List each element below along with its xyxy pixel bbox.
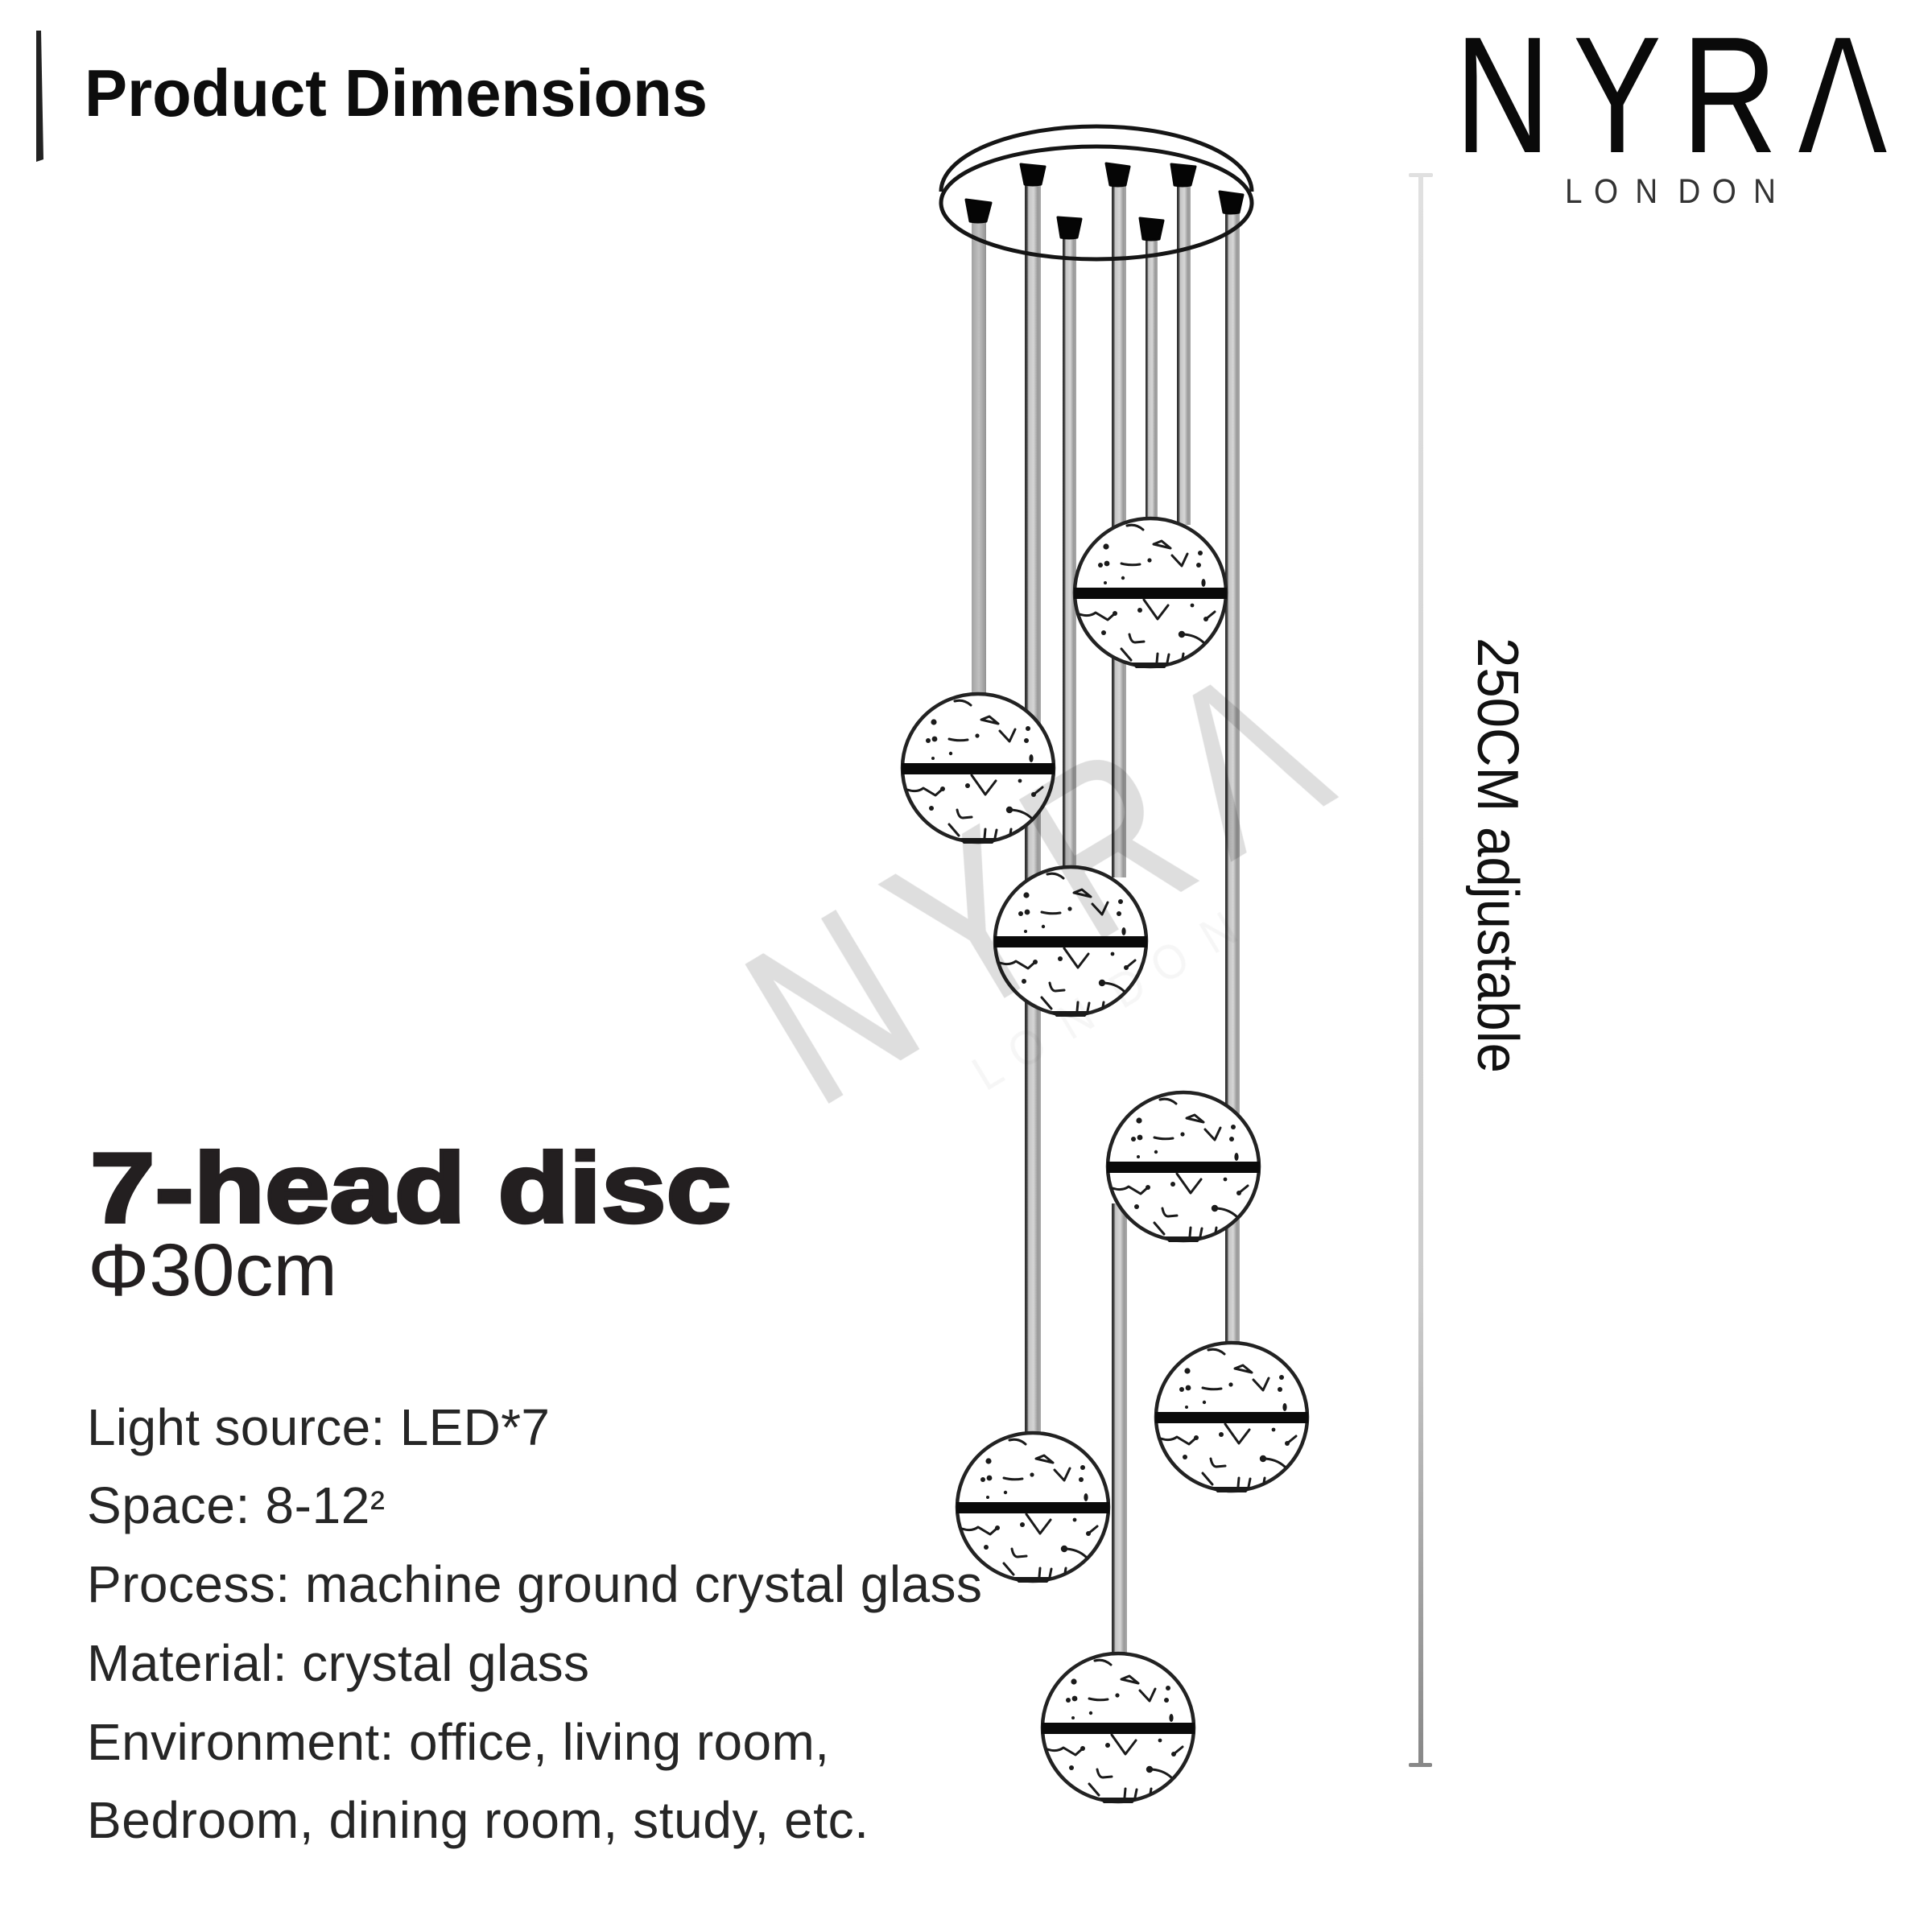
specification list: [87, 1398, 982, 1849]
pendant disc 4: [1107, 1092, 1260, 1242]
height dimension line: [1409, 173, 1433, 1767]
ceiling canopy ring: [941, 126, 1252, 259]
hanging rods: [972, 182, 1240, 1654]
title: Product Dimensions: Product Dimensions: [85, 56, 708, 130]
spec: space: Space: 8-12: [87, 1476, 369, 1534]
spec: environment: Environment: office, living room,: [87, 1713, 829, 1771]
pendant disc 3: [994, 867, 1147, 1017]
pendant disc 6: [956, 1433, 1109, 1583]
product name: 7-head disc: [90, 1133, 731, 1244]
spec: space: ²: [370, 1483, 385, 1531]
heading accent bar: [36, 31, 43, 162]
brand logo: [1465, 38, 1887, 203]
height label: 250CM adjustable: [1465, 638, 1530, 1073]
watermark logo: NYRA: [707, 615, 1364, 1153]
logo subline: LONDON: [1565, 171, 1776, 210]
spec: material: Material: crystal glass: [87, 1634, 589, 1692]
pendant disc 2: [902, 694, 1055, 844]
diameter: Φ30cm: [88, 1229, 337, 1311]
spec: light source: Light source: LED*7: [87, 1398, 550, 1456]
rod mounting cups: [966, 163, 1243, 240]
pendant disc 7: [1042, 1653, 1195, 1803]
pendant disc 1: [1074, 518, 1227, 668]
watermark logo: LONDON: [964, 902, 1246, 1101]
spec: process: Process: machine ground crystal glass: [87, 1555, 982, 1613]
logo wordmark: NYRA: [1455, 2, 1887, 188]
pendant disc 5: [1155, 1343, 1308, 1492]
spec: environment continued: Bedroom, dining room, study, etc.: [87, 1791, 869, 1849]
